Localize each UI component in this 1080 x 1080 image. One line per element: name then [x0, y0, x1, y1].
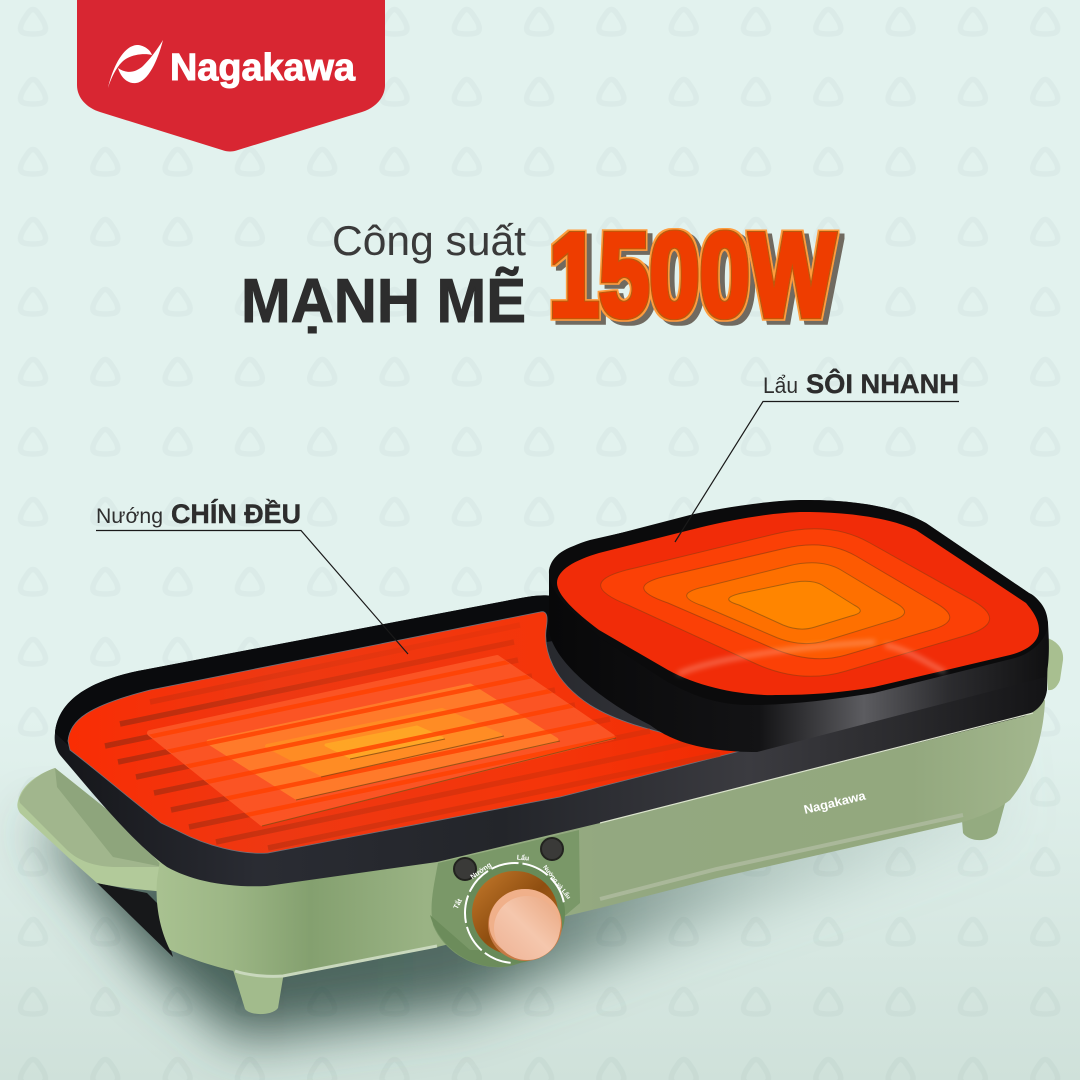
- dial scale: [461, 859, 569, 967]
- right handle: [1044, 637, 1063, 690]
- hot pot: [549, 500, 1049, 752]
- dial labels: [451, 853, 572, 911]
- ring 4: [729, 581, 860, 629]
- heat zone outer: [150, 658, 612, 823]
- heat zone centre: [326, 727, 442, 757]
- title: MẠNH MẼ: [241, 267, 526, 336]
- callout: Lẩu SÔI NHANH: SÔI NHANH: [806, 368, 959, 399]
- callout: Nướng CHÍN ĐỀU: [96, 498, 408, 654]
- dial labels: Lẩu: [516, 853, 530, 863]
- knob: [472, 871, 562, 961]
- logo banner: [77, 0, 385, 152]
- control panel: [430, 830, 580, 967]
- logo banner: Nagakawa: [170, 47, 356, 89]
- pot wall: [549, 500, 1049, 752]
- grill plate: [68, 612, 752, 853]
- indicator light right: [541, 838, 563, 860]
- foot left: [233, 970, 284, 1014]
- product: electric hotpot grill: [17, 500, 1063, 1014]
- brand on body: Nagakawa: [802, 788, 868, 817]
- black bracket under handle: [97, 883, 173, 957]
- callout: Lẩu SÔI NHANH: Lẩu: [763, 373, 798, 398]
- indicator light left: [454, 858, 476, 880]
- title: [241, 209, 836, 342]
- heat zone third: [267, 710, 500, 774]
- ring 2: [644, 545, 950, 659]
- black rim: [55, 595, 1048, 886]
- dial labels: Nướng: [470, 862, 493, 881]
- title: Công suất: [332, 217, 526, 264]
- dial labels: Nướng và Lẩu: [541, 864, 572, 901]
- callout: Nướng CHÍN ĐỀU: CHÍN ĐỀU: [171, 498, 301, 529]
- callout: Nướng CHÍN ĐỀU: Nướng: [96, 504, 163, 528]
- dial labels: Tắt: [451, 896, 464, 911]
- heat zone edges: [262, 736, 616, 826]
- ribs across heat zones: [149, 660, 616, 816]
- ring 3: [687, 563, 905, 644]
- pot interior: [557, 512, 1039, 695]
- body: [157, 700, 1045, 977]
- callout: Lẩu SÔI NHANH: [675, 368, 959, 542]
- pot rim: [549, 500, 1048, 705]
- reflection: [678, 642, 945, 674]
- icon: Nagakawa swirl: [108, 40, 163, 88]
- ring 1: [601, 529, 990, 676]
- heat zone second: [209, 686, 556, 797]
- power figure: 1500W: [549, 209, 836, 342]
- foot right: [962, 800, 1006, 840]
- grill ribs: [105, 625, 720, 848]
- left handle: [17, 768, 172, 892]
